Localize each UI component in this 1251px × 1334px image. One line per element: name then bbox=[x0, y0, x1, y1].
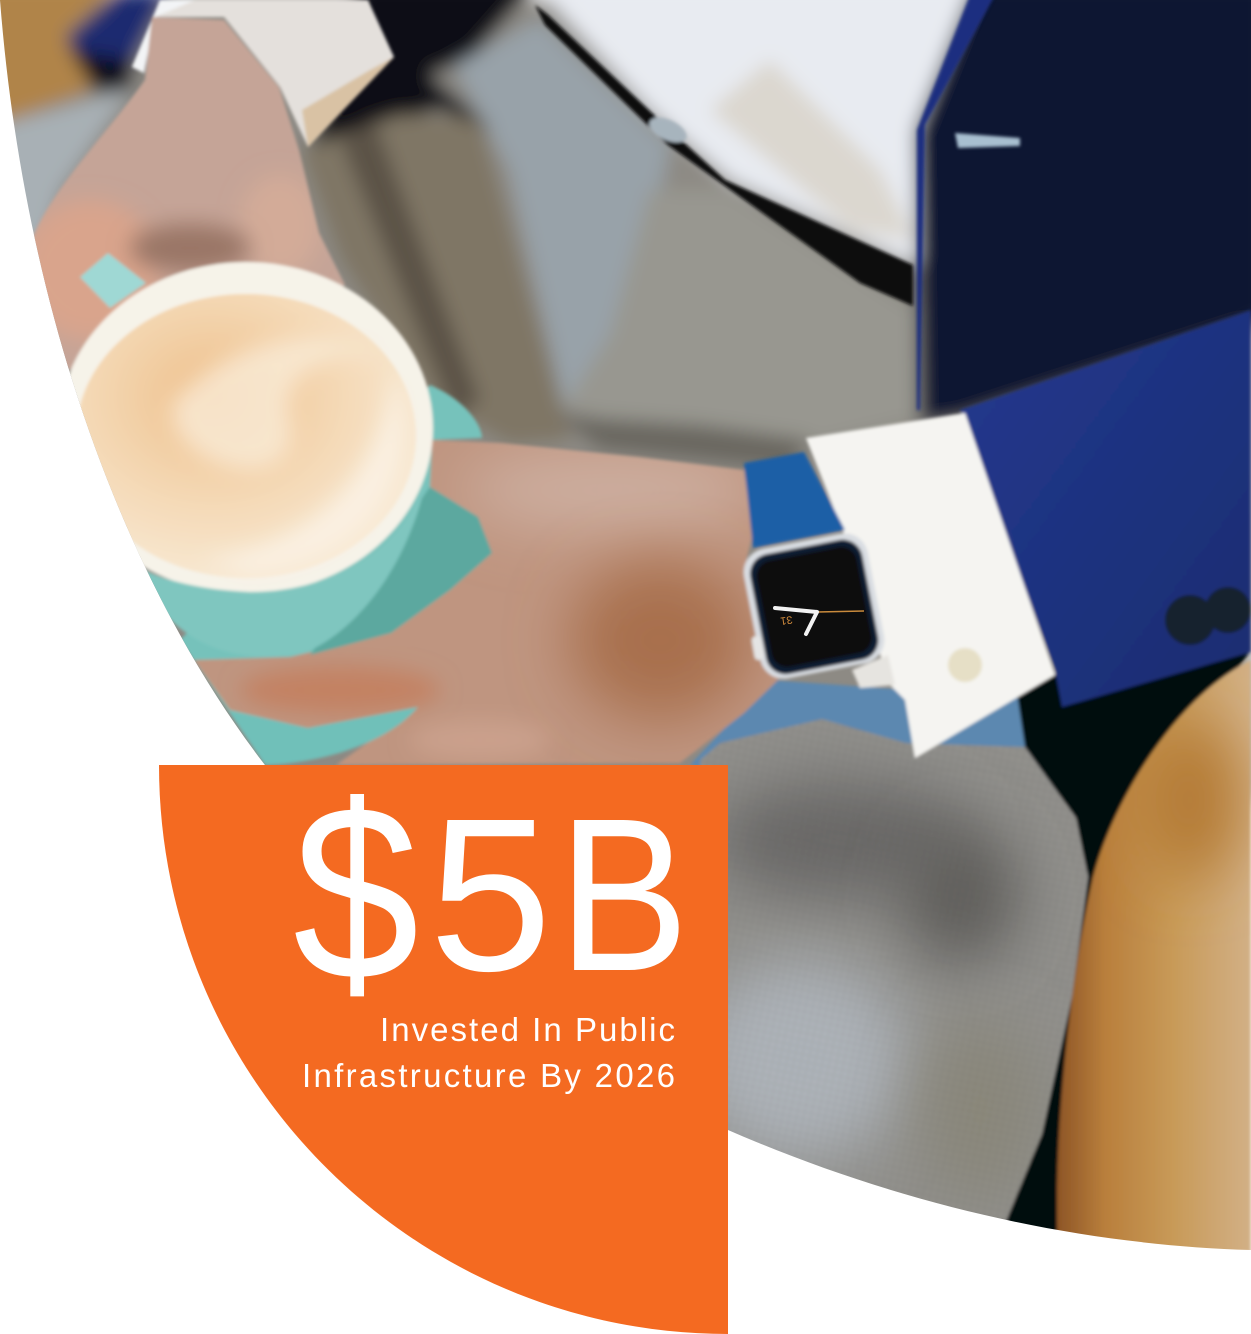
sleeve button one bbox=[1165, 595, 1215, 645]
light lower-left bbox=[690, 960, 910, 1160]
white shirt bbox=[530, 0, 975, 265]
big figure: $5B: 5 bbox=[429, 774, 552, 1017]
cuff tan underside bbox=[302, 57, 394, 147]
lap under cuff bbox=[690, 680, 1060, 800]
dark weave right bbox=[900, 825, 1020, 965]
upper shirt cuff bbox=[132, 0, 394, 147]
blurred background: floor, trousers, shirt, jacket bbox=[0, 0, 1251, 800]
caption bbox=[302, 1011, 675, 1094]
watch date: 31 bbox=[779, 613, 793, 627]
saucer bbox=[180, 385, 487, 765]
cup handle bbox=[80, 253, 146, 308]
belt buckle bbox=[646, 114, 688, 146]
watch face bbox=[754, 544, 875, 670]
cup rim bbox=[59, 262, 433, 594]
big figure: $5B: $ bbox=[293, 753, 419, 1032]
leather warm highlight bbox=[1140, 720, 1240, 880]
watch hands bbox=[775, 608, 817, 634]
caption line 2: Infrastructure By 2026 bbox=[302, 1057, 675, 1094]
lower hand and wrist bbox=[194, 440, 781, 765]
finger tone bbox=[240, 666, 440, 714]
coffee foam bbox=[76, 294, 416, 578]
navy fabric corner bbox=[66, 0, 170, 67]
watch case bbox=[740, 529, 888, 683]
lower knuckle tone bbox=[410, 720, 550, 760]
shadow between fingers bbox=[130, 224, 250, 272]
belt bbox=[535, 5, 913, 306]
foam pale edge bbox=[200, 370, 405, 575]
shirt cuff bbox=[806, 413, 1055, 758]
beige folds of trousers bbox=[300, 115, 570, 445]
lower right trousers bbox=[565, 190, 915, 455]
watch strap lower bbox=[852, 655, 895, 688]
plaid knee bbox=[700, 719, 1088, 1225]
light knuckle tone bbox=[460, 450, 760, 530]
dark gap bbox=[990, 650, 1251, 1260]
blue-grey trouser band bbox=[455, 20, 670, 405]
thumb tone bbox=[244, 180, 318, 266]
tanned lower tone bbox=[570, 560, 750, 720]
dark region behind cuff bbox=[310, 0, 540, 150]
warm lower-right bbox=[920, 1020, 1040, 1200]
front saucer edge bbox=[230, 707, 418, 765]
dark shadow under navy bbox=[70, 50, 135, 92]
leather chair bbox=[1057, 660, 1251, 1270]
cup body bbox=[135, 450, 432, 657]
dark weave upper bbox=[710, 780, 970, 900]
dark fold line bbox=[340, 120, 480, 420]
jacket lapel edge bbox=[917, 0, 995, 410]
upper hand bbox=[30, 17, 345, 372]
foam swirl bbox=[172, 338, 385, 470]
watch bezel bbox=[747, 536, 882, 678]
cuff white trim bbox=[132, 0, 195, 73]
wooden floor bbox=[0, 0, 125, 130]
suit sleeve bbox=[960, 310, 1251, 707]
watch crown bbox=[751, 635, 765, 661]
watch second hand bbox=[817, 611, 864, 612]
warm finger tone bbox=[20, 200, 160, 340]
dark saucer well bbox=[310, 487, 492, 655]
orange quarter-circle panel bbox=[159, 765, 728, 1334]
upper hand tones bbox=[20, 175, 320, 340]
shirt beige shade bbox=[710, 60, 915, 240]
trouser bottom shadow bbox=[555, 415, 810, 470]
plaid tonal blobs bbox=[707, 726, 1090, 1220]
fine weave texture bbox=[700, 715, 1100, 1235]
sleeve button two bbox=[1205, 587, 1251, 633]
big figure: $5B: B bbox=[558, 774, 689, 1017]
navy jacket bbox=[915, 0, 1251, 425]
cuff button bbox=[948, 648, 982, 682]
pocket square bbox=[955, 133, 1020, 148]
caption line 1: Invested In Public bbox=[380, 1011, 675, 1048]
left trouser leg bbox=[12, 70, 132, 254]
watch strap upper bbox=[744, 452, 845, 548]
hand tones bbox=[240, 450, 760, 760]
